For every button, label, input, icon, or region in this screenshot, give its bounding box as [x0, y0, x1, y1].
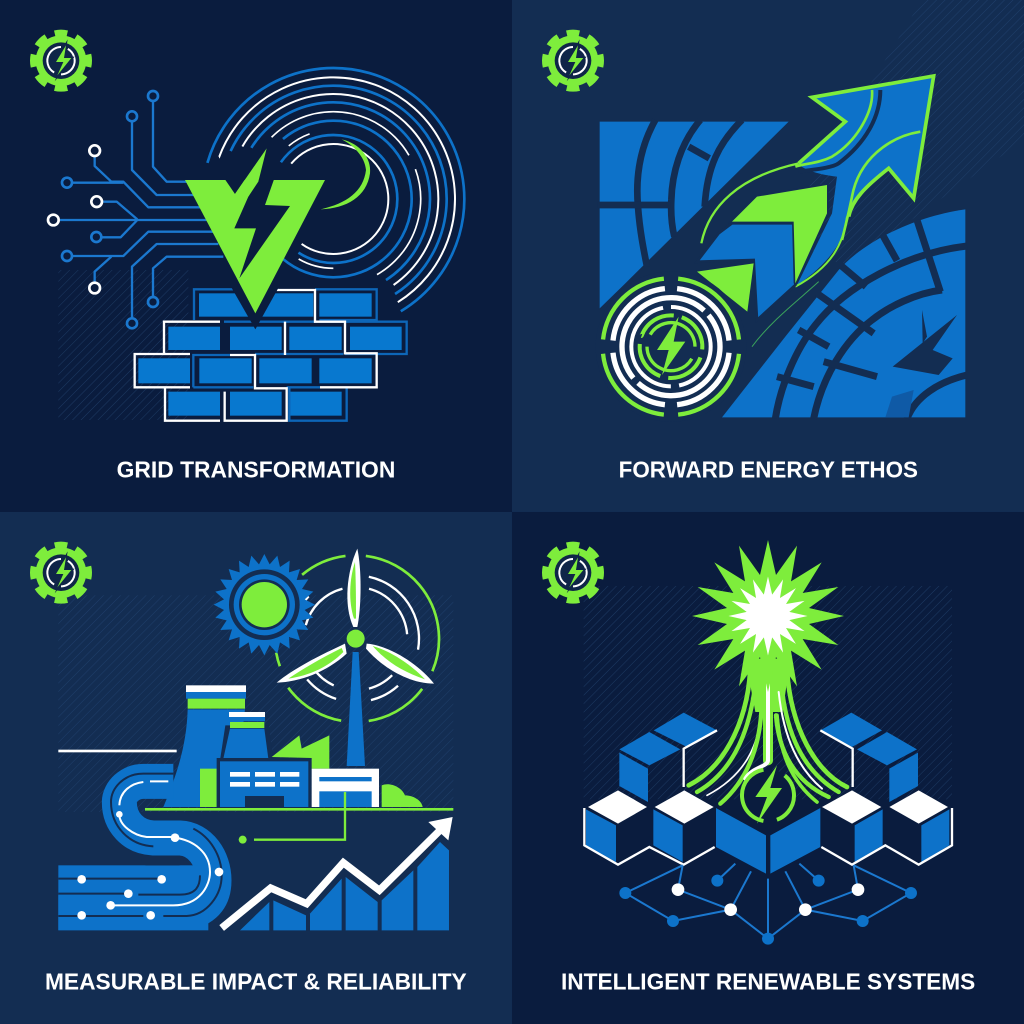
lightning V emblem — [185, 148, 325, 329]
horizontal white line — [58, 750, 177, 752]
chevrons — [697, 185, 827, 320]
green ground and connector — [145, 792, 453, 844]
rising arrow — [701, 76, 934, 347]
wind turbine — [277, 549, 434, 766]
winding data river — [58, 774, 223, 930]
centre blue cube — [716, 808, 820, 874]
icon: gear badge — [28, 28, 94, 93]
heading: grid transformation: GRID TRANSFORMATION — [117, 457, 395, 483]
panel: forward energy ethos — [512, 0, 1024, 512]
circuit traces — [60, 102, 223, 318]
tiled blue right block — [722, 209, 967, 419]
energy fountain strands — [689, 645, 847, 804]
energy badge ring — [731, 759, 805, 832]
heading: intelligent renewable systems: INTELLIGENT RENEWABLE SYSTEMS — [561, 969, 975, 995]
node network — [619, 864, 917, 945]
green spiral hook — [321, 139, 370, 209]
brick wall — [135, 289, 407, 421]
icon: gear badge — [28, 540, 94, 605]
circuit nodes — [48, 91, 158, 328]
icon: gear badge — [540, 28, 606, 93]
wind rings — [238, 521, 473, 756]
white-top cubes — [584, 790, 952, 865]
panel: grid transformation — [0, 0, 512, 512]
tiled blue left block — [598, 120, 789, 308]
icon: gear badge — [540, 540, 606, 605]
power plant — [163, 685, 423, 808]
rising bar chart — [222, 817, 453, 930]
heading: forward energy ethos: FORWARD ENERGY ETHOS — [619, 457, 918, 483]
panel: measurable impact and reliability — [0, 512, 512, 1024]
burst star — [692, 540, 844, 692]
energy ring emblem — [596, 271, 746, 422]
concentric signal arcs — [171, 37, 495, 361]
heading: measurable impact and reliability: MEASURABLE IMPACT & RELIABILITY — [45, 969, 467, 995]
upper blue cubes — [619, 713, 918, 802]
panel: intelligent renewable systems — [512, 512, 1024, 1024]
sun — [214, 554, 315, 655]
